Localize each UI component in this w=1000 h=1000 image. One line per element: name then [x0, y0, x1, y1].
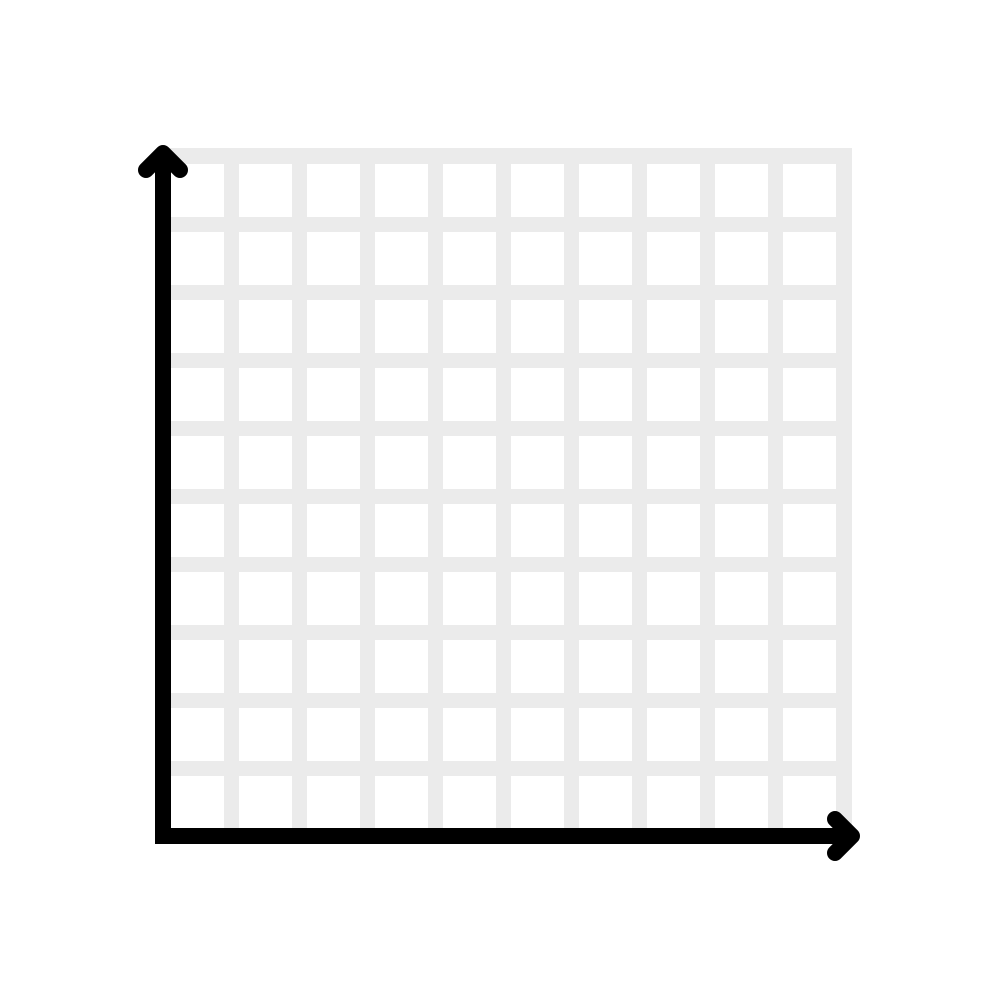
arrow: x axis head [835, 819, 852, 853]
axes [146, 153, 852, 853]
arrow: y axis head [146, 153, 180, 170]
grid background [160, 148, 852, 838]
